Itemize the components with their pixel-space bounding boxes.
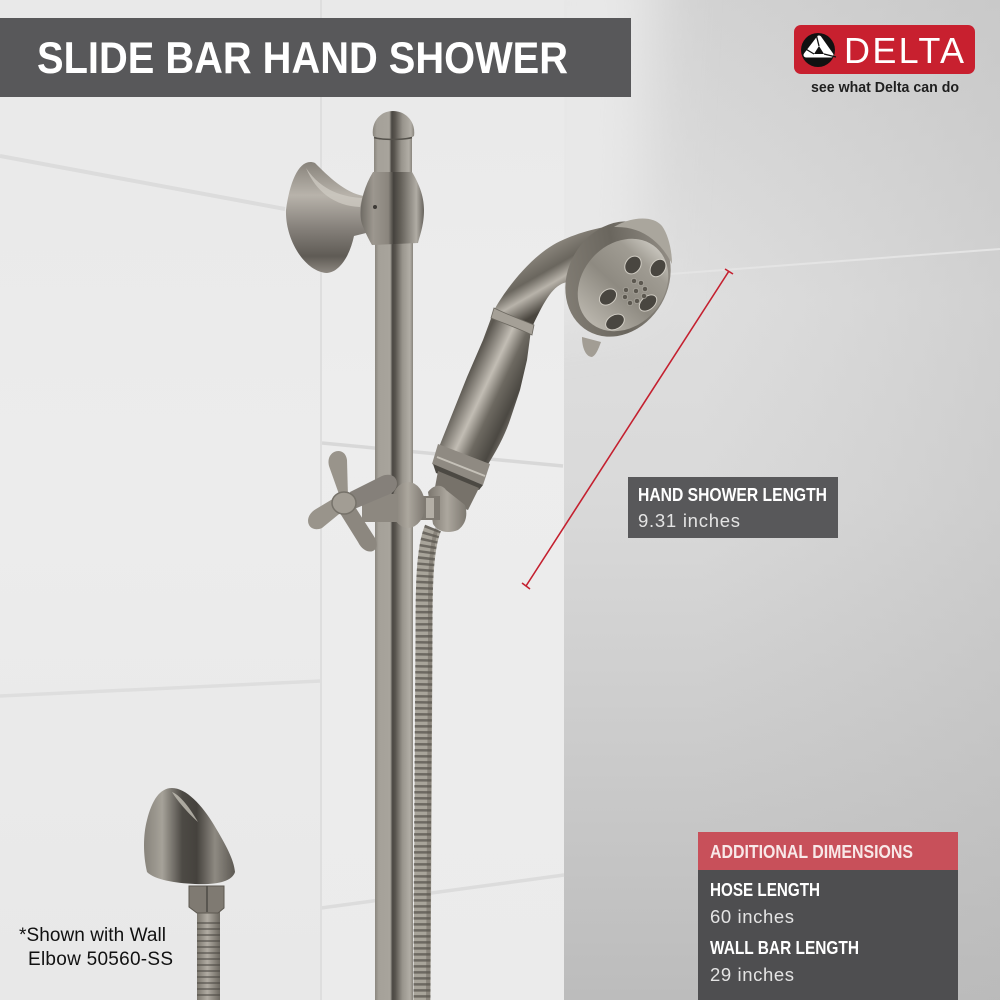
holder: [428, 486, 466, 532]
icon: Delta triangle: [801, 33, 836, 67]
dimension line: [522, 269, 733, 589]
title: SLIDE BAR HAND SHOWER: [37, 34, 568, 83]
cross handle cap: [332, 492, 356, 514]
panel body: 29 inches: [710, 964, 794, 985]
wall elbow: [144, 788, 235, 1000]
panel header: [698, 832, 958, 870]
elbow hose: [197, 908, 220, 1000]
tagline: see what Delta can do: [811, 79, 959, 96]
panel body: [698, 870, 958, 1000]
Delta logo: [794, 25, 975, 96]
slide bracket and cross handle: [308, 451, 466, 552]
elbow nut: [189, 886, 224, 913]
handle lower collar: [432, 444, 490, 485]
bar top neck: [374, 136, 412, 176]
spray holes: [596, 253, 669, 333]
connector: [418, 496, 440, 520]
title banner: [0, 18, 631, 97]
footnote: [19, 925, 173, 970]
slide bar: [286, 111, 424, 1000]
wall bracket flange: [286, 162, 366, 273]
shower handle body: [433, 313, 531, 466]
shower neck: [493, 225, 616, 325]
bar shaft: [375, 240, 413, 1000]
panel header: ADDITIONAL DIMENSIONS: [710, 841, 913, 862]
panel: additional dimensions: [698, 832, 958, 1000]
panel body: 60 inches: [710, 906, 794, 927]
spray nozzle cluster: [622, 278, 648, 306]
panel body: WALL BAR LENGTH: [710, 937, 859, 958]
bar top finial: [373, 111, 414, 140]
shower head face: [559, 220, 687, 350]
callout: hand shower length: HAND SHOWER LENGTH: [638, 484, 827, 505]
cross handle arms: [308, 451, 397, 552]
callout: hand shower length: 9.31 inches: [638, 510, 740, 531]
hose from hand shower holder: [422, 528, 437, 1000]
callout: hand shower length: [628, 477, 838, 538]
handle ring: [491, 308, 534, 335]
wordmark: DELTA: [844, 30, 964, 71]
shower head rim: [545, 202, 691, 356]
shower lever: [582, 337, 601, 357]
slide knob body: [391, 482, 425, 528]
bar collar: [360, 172, 424, 245]
footnote: Elbow 50560-SS: [28, 949, 173, 970]
elbow dome: [144, 788, 235, 884]
hand shower: [432, 202, 691, 510]
footnote: *Shown with Wall: [19, 925, 166, 946]
panel body: HOSE LENGTH: [710, 879, 820, 900]
